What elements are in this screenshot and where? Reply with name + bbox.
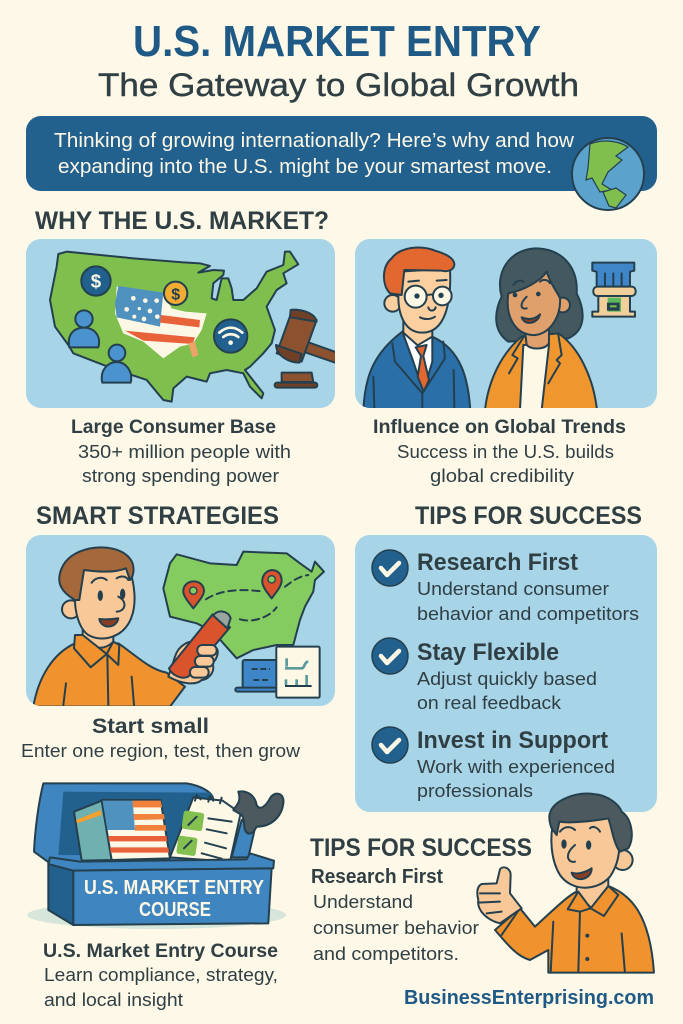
- panel: large consumer base: [26, 239, 347, 408]
- caption: large consumer base: [71, 417, 291, 486]
- caption: influence on global trends: global credibility: [430, 466, 574, 486]
- caption: large consumer base: Large Consumer Base: [71, 417, 276, 438]
- icon: dollar coin blue: $: [91, 271, 102, 292]
- caption: start small: [21, 715, 301, 761]
- icon: laptop and chart card: [235, 647, 320, 698]
- caption: start small: Enter one region, test, then grow: [21, 741, 301, 761]
- footer website: BusinessEnterprising.com: [404, 987, 654, 1009]
- tip: stay flexible: on real feedback: [417, 693, 562, 713]
- tip: stay flexible: Stay Flexible: [417, 639, 559, 666]
- caption: influence on global trends: Success in the U.S. builds: [397, 442, 614, 462]
- wrench: [232, 791, 283, 857]
- block: tips for success lower: and competitors.: [313, 944, 459, 964]
- illustration: man thumbs up: [477, 794, 654, 973]
- icon: globe: [572, 138, 644, 210]
- toolbox body: [48, 853, 274, 925]
- caption: large consumer base: 350+ million people with: [78, 442, 291, 462]
- icon: person one: [69, 310, 99, 347]
- caption: course: and local insight: [44, 990, 183, 1010]
- icon: wifi: [214, 319, 247, 353]
- map with location pins: [163, 552, 324, 658]
- man with marker: [33, 547, 231, 707]
- title: [98, 17, 579, 103]
- tip: research first: Research First: [417, 549, 578, 576]
- caption: large consumer base: strong spending power: [82, 466, 279, 486]
- panel: tips for success: [355, 535, 657, 812]
- tip: stay flexible: [372, 638, 597, 713]
- banner: [26, 116, 657, 210]
- banner: Thinking of growing internationally? Here’s why and how: [54, 130, 575, 152]
- tip: invest in support: Invest in Support: [417, 727, 608, 754]
- title: The Gateway to Global Growth: [98, 67, 579, 103]
- icon: institution building: [592, 263, 636, 317]
- heading: smart strategies: SMART STRATEGIES: [36, 502, 279, 530]
- block: tips for success lower: TIPS FOR SUCCESS: [310, 834, 532, 862]
- caption: course: Learn compliance, strategy,: [44, 965, 278, 985]
- block: tips for success lower: Research First: [311, 866, 443, 888]
- tip: research first: Understand consumer: [417, 579, 609, 599]
- block: tips for success lower: consumer behavior: [313, 918, 479, 938]
- icon: person two: [102, 345, 131, 383]
- caption: start small: Start small: [92, 715, 209, 738]
- caption: course: [43, 941, 278, 1010]
- booklet: [74, 801, 112, 861]
- icon: dollar coin blue: [81, 266, 111, 296]
- block: tips for success lower: Understand: [313, 892, 413, 912]
- icon: gold coin: $: [171, 286, 180, 303]
- tip: invest in support: Work with experienced: [417, 757, 615, 777]
- tip: invest in support: [372, 727, 615, 801]
- illustration: course toolbox: [27, 783, 286, 929]
- tip: invest in support: professionals: [417, 781, 533, 801]
- banner: expanding into the U.S. might be your smartest move.: [58, 156, 552, 178]
- caption: influence on global trends: Influence on Global Trends: [373, 417, 626, 438]
- flag shape: [115, 286, 207, 358]
- block: tips for success lower: [310, 834, 532, 964]
- tip: stay flexible: Adjust quickly based: [417, 669, 597, 689]
- man in suit: [363, 248, 470, 410]
- flag card: [102, 800, 170, 860]
- toolbox body: U.S. MARKET ENTRY: [84, 877, 264, 899]
- heading: why the U.S. market: WHY THE U.S. MARKET?: [35, 207, 329, 235]
- icon: gold coin: [164, 282, 187, 305]
- caption: course: U.S. Market Entry Course: [43, 941, 278, 962]
- tip: research first: behavior and competitors: [417, 604, 639, 624]
- panel: influence on global trends: [355, 239, 657, 410]
- map of the U.S.: [50, 252, 298, 402]
- tip: research first: [372, 549, 639, 624]
- woman in orange jacket: [485, 248, 597, 410]
- caption: influence on global trends: [373, 417, 626, 486]
- toolbox body: COURSE: [139, 899, 211, 921]
- checklist: [170, 795, 241, 862]
- icon: gavel: [274, 308, 335, 389]
- panel: start small strategy: [26, 535, 335, 707]
- title: U.S. MARKET ENTRY: [133, 17, 541, 66]
- heading: tips for success: TIPS FOR SUCCESS: [415, 502, 642, 530]
- thumb up hand: [477, 867, 522, 923]
